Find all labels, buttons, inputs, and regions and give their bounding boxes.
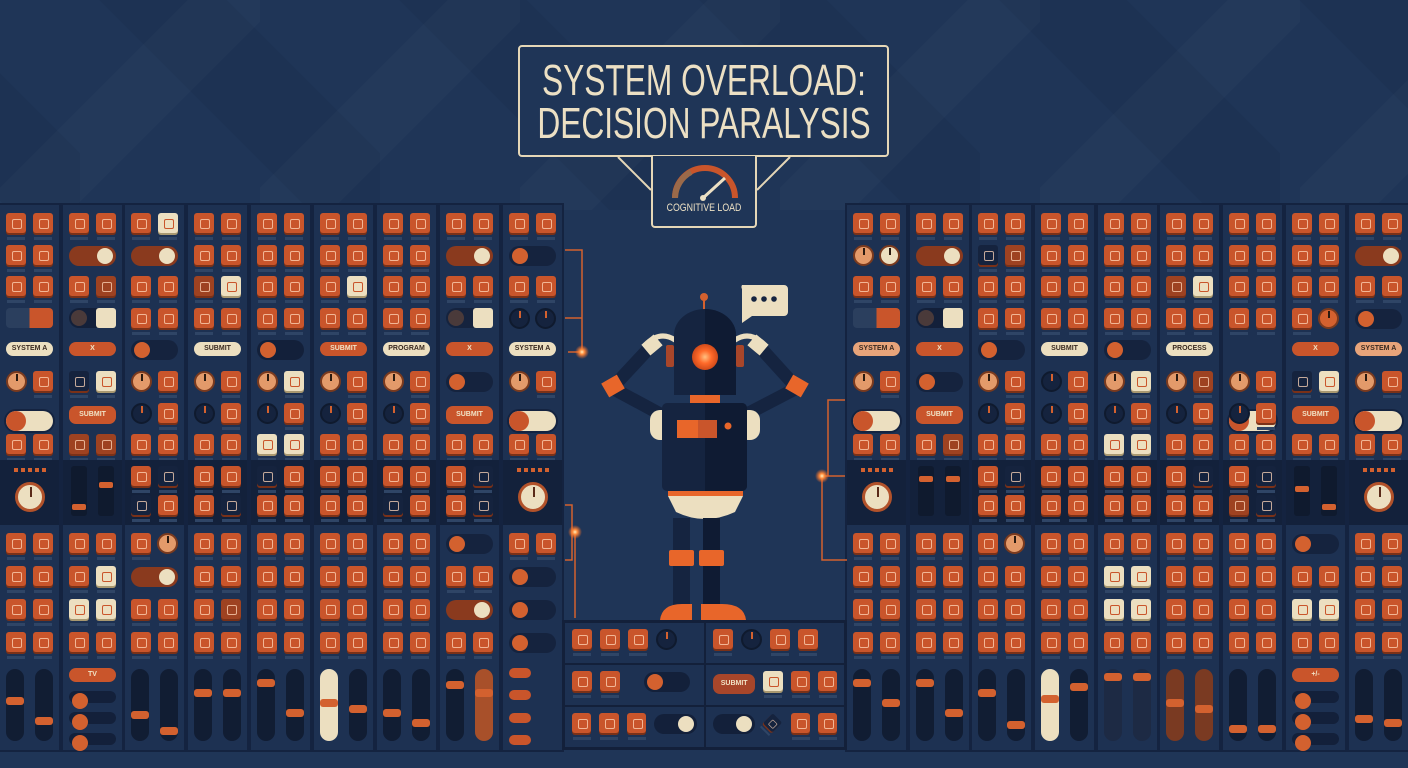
panel: left control column 8: SUBMIT <box>456 411 483 418</box>
panel: left control column 2: TV <box>88 671 97 678</box>
panel: right control column 7 <box>1223 205 1282 750</box>
panel: right control column 4: SUBMIT <box>1051 345 1078 352</box>
wire: left upper <box>565 250 589 359</box>
title: SYSTEM OVERLOAD: <box>542 56 866 105</box>
console panel: bottom right <box>705 706 845 748</box>
gauge: cognitive load: COGNITIVE LOAD <box>667 202 741 214</box>
panel: left control column 4 <box>188 205 247 750</box>
panel: right control column 6 <box>1160 205 1219 750</box>
panel: left control column 1: SYSTEM A <box>12 345 47 352</box>
panel: left control column 3 <box>125 205 184 750</box>
panel: right control column 8: X <box>1313 345 1318 352</box>
panel: right control column 8: +/- <box>1311 671 1320 678</box>
panel: right control column 3 <box>972 205 1031 750</box>
neck and body <box>650 395 760 519</box>
legs <box>660 518 746 620</box>
panel: right control column 2: SUBMIT <box>926 411 953 418</box>
panel: right control column 8 <box>1286 205 1345 750</box>
panel: right control column 6: PROCESS <box>1172 345 1207 352</box>
panel: left control column 9 <box>503 205 562 750</box>
panel: left control column 2: X <box>90 345 95 352</box>
panel: right control column 1 <box>847 205 906 750</box>
console panel: middle right: SUBMIT <box>721 680 748 687</box>
bottom console <box>562 620 847 750</box>
robot <box>601 285 809 620</box>
console panel: bottom left <box>564 706 705 748</box>
arms <box>601 334 809 415</box>
title: DECISION PARALYSIS <box>537 99 871 148</box>
antenna <box>700 293 708 312</box>
title <box>518 45 889 157</box>
panel: left control column 2: SUBMIT <box>79 411 106 418</box>
panel: left control column 9: SYSTEM A <box>515 345 550 352</box>
panel: right control column 4 <box>1035 205 1094 750</box>
panel: right control column 8: SUBMIT <box>1302 411 1329 418</box>
panel: right control column 5 <box>1098 205 1157 750</box>
console panel: middle right <box>705 664 845 706</box>
panel: left control column 1 <box>0 205 59 750</box>
wire: right <box>815 400 847 560</box>
wire: left lower <box>565 505 582 618</box>
console panel: middle left <box>564 664 705 706</box>
panel: left control column 7 <box>377 205 436 750</box>
panel: right control column 9: SYSTEM A <box>1361 345 1396 352</box>
panel: left control column 8 <box>440 205 499 750</box>
panel: left control column 6: SUBMIT <box>330 345 357 352</box>
panel: right control column 2 <box>910 205 969 750</box>
panel: left control column 5 <box>251 205 310 750</box>
speech bubble <box>741 285 788 323</box>
gauge: cognitive load <box>651 156 757 228</box>
console panel: top left <box>564 622 705 664</box>
panel: left control column 2 <box>63 205 122 750</box>
panel: left control column 6 <box>314 205 373 750</box>
panel: right control column 9 <box>1349 205 1408 750</box>
head <box>666 309 744 395</box>
panel: right control column 1: SYSTEM A <box>859 345 894 352</box>
panel: left control column 7: PROGRAM <box>388 345 425 352</box>
console panel: top right <box>705 622 845 664</box>
panel: left control column 4: SUBMIT <box>204 345 231 352</box>
panel: left control column 8: X <box>467 345 472 352</box>
panel: right control column 2: X <box>937 345 942 352</box>
